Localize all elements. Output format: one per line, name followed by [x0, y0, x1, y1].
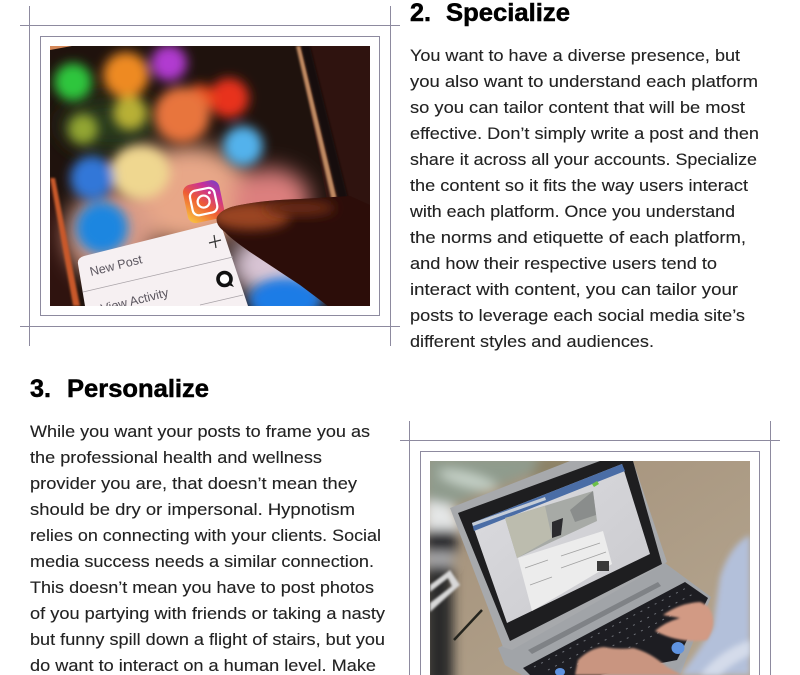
laptop base [498, 563, 711, 675]
text block: Personalize body: media success needs a similar connection. [30, 552, 374, 571]
text block: Specialize body: with each platform. Once you understand [409, 202, 735, 221]
finger [216, 196, 360, 306]
text block: Personalize body [30, 422, 386, 675]
text block: Specialize body: you also want to understand each platform [410, 72, 758, 91]
text block: Specialize body: effective. Don’t simply write a post and then [410, 124, 759, 143]
text block: Specialize body: different styles and audiences. [410, 332, 654, 351]
frame: Instagram photo [20, 6, 400, 346]
screen [472, 464, 650, 623]
keyboard [523, 582, 708, 675]
text block: Personalize body: of you partying with friends or taking a nasty [30, 604, 386, 623]
text block: Personalize body: but funny spill down a flight of stairs, but you [30, 630, 385, 649]
sleeve [680, 535, 750, 675]
menu card [78, 222, 248, 306]
text block: Personalize body: provider you are, that doesn’t mean they [30, 474, 358, 493]
text block: Specialize body: posts to leverage each social media site’s [410, 306, 745, 325]
heading: 3. Personalize: Personalize [67, 375, 209, 403]
Facebook cover and content [505, 491, 597, 558]
text block: Specialize body: the content so it fits the way users interact [410, 176, 748, 195]
white frame object [430, 570, 460, 612]
text block: Specialize body: and how their respective users tend to [410, 254, 717, 273]
hands [655, 602, 713, 641]
text block: Personalize body: While you want your posts to frame you as [30, 422, 370, 441]
text block: Specialize body: so you can tailor content that will be most [410, 98, 745, 117]
text block: Specialize body: interact with content, you can tailor your [410, 280, 738, 299]
photo: finger pressing Instagram icon on phone [50, 45, 375, 322]
text block: Specialize body [409, 46, 759, 351]
text block: Specialize body: You want to have a diverse presence, but [410, 46, 740, 65]
text block: Specialize body: the norms and etiquette of each platform, [410, 228, 746, 247]
text block: Specialize body: share it across all your accounts. Specialize [410, 150, 757, 169]
photo: hands typing on a laptop showing Facebook [425, 455, 750, 675]
text block: Personalize body: should be dry or impersonal. Hypnotism [30, 500, 355, 519]
text block: Personalize body: This doesn’t mean you have to post photos [30, 578, 374, 597]
phone edge [294, 46, 338, 198]
photo: finger pressing Instagram icon on phone: View Activity [99, 285, 171, 316]
text block: Personalize body: the professional health and wellness [30, 448, 322, 467]
laptop lid [450, 461, 667, 650]
photo: finger pressing Instagram icon on phone: New Post [88, 252, 144, 279]
text block: Personalize body: relies on connecting with your clients. Social [30, 526, 381, 545]
text block: Personalize body: do want to interact on a human level. Make [30, 656, 376, 675]
Instagram icon [183, 180, 224, 223]
heading: 3. Personalize: 3. [30, 375, 51, 403]
frame: laptop photo [400, 421, 780, 675]
